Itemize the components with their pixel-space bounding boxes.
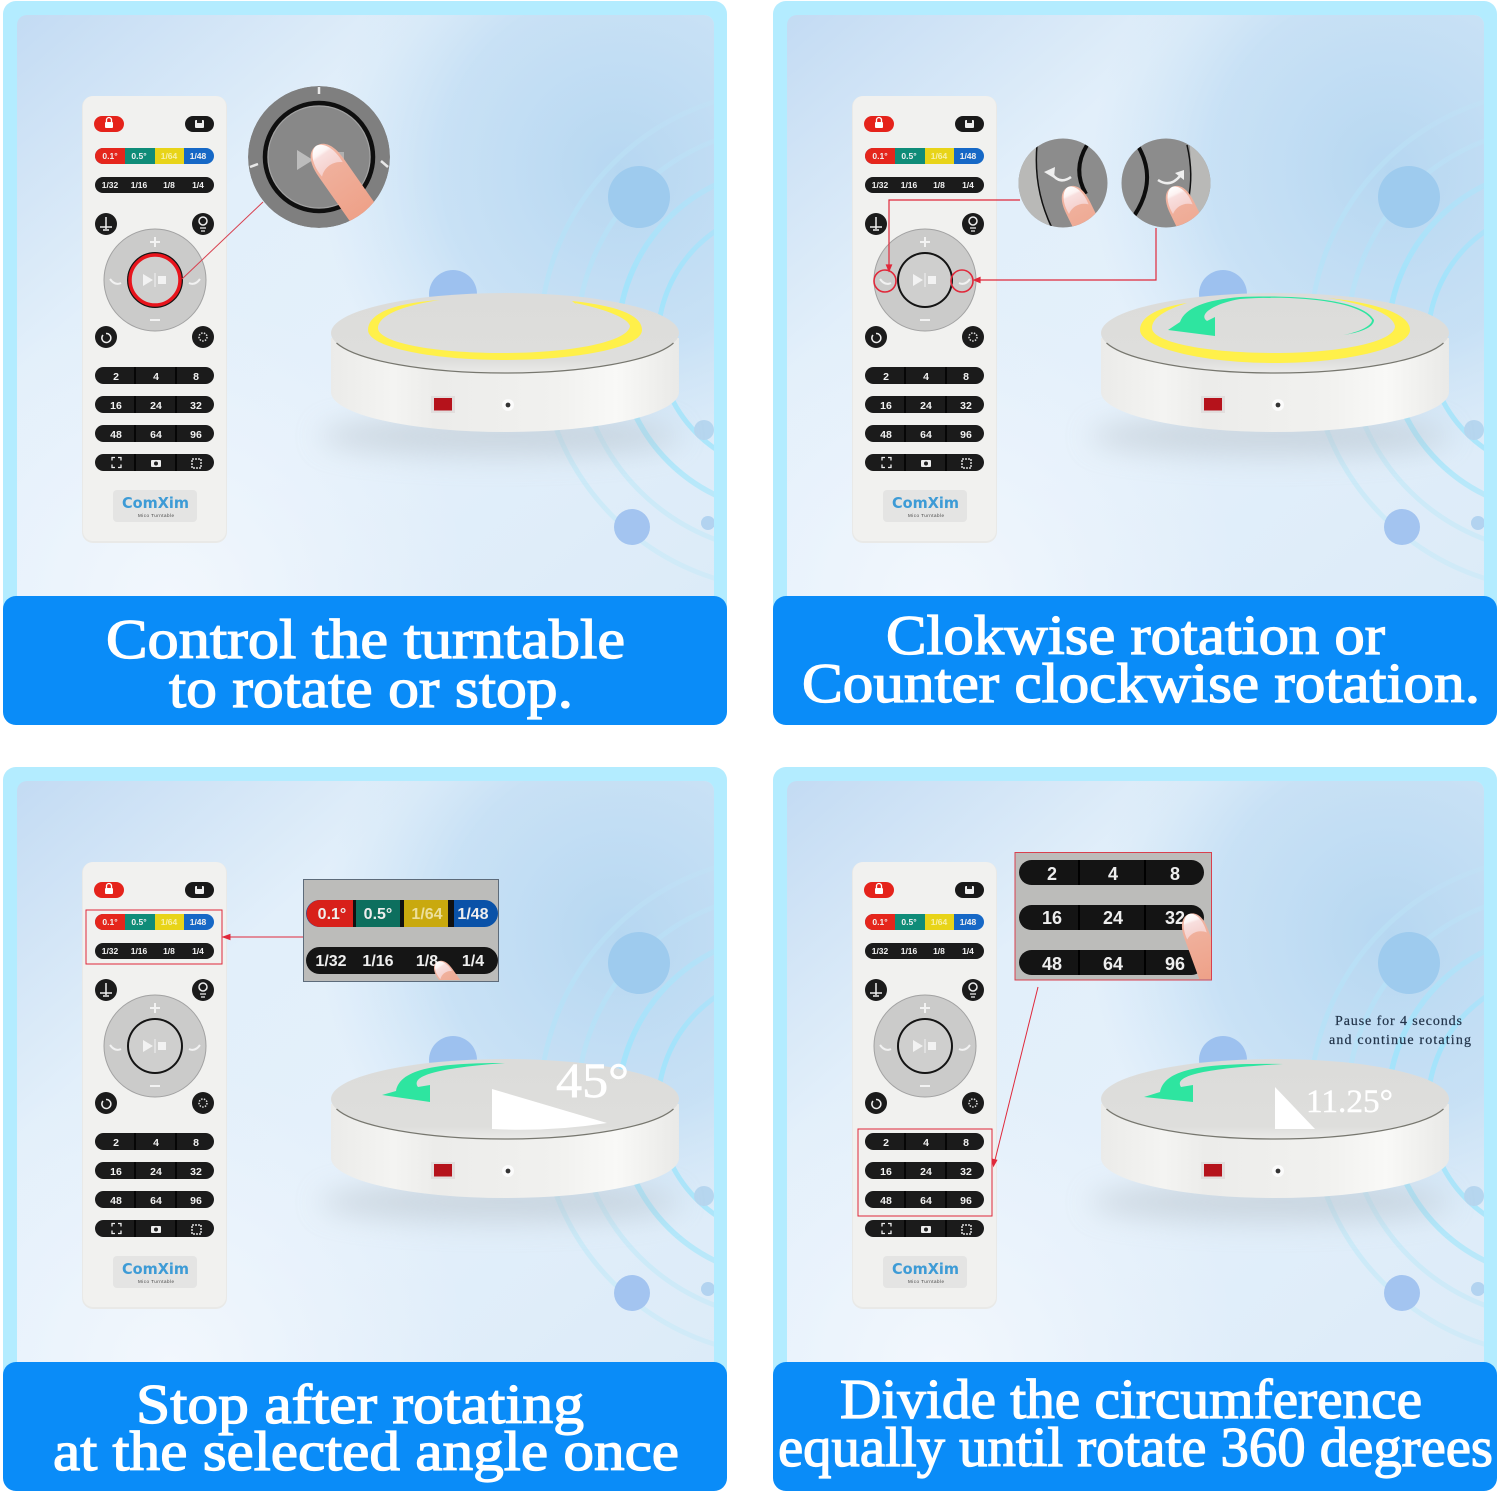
green rotation arrow	[382, 1063, 505, 1102]
turntable	[320, 1059, 680, 1222]
magnified number buttons with finger: 48	[1042, 954, 1062, 974]
remote labels: 1/64	[931, 151, 948, 161]
magnified number buttons with finger: 8	[1170, 864, 1180, 884]
panel background	[773, 1, 1500, 661]
remote labels: 4	[153, 1137, 159, 1149]
remote labels: 24	[150, 1166, 162, 1178]
remote labels: 8	[193, 371, 199, 383]
remote labels: 16	[880, 1166, 892, 1178]
remote control	[82, 96, 227, 543]
remote labels: 1/16	[901, 946, 918, 956]
caption bar: Stop after rotating	[136, 1374, 584, 1436]
remote labels: 32	[190, 1166, 202, 1178]
remote labels: 0.5°	[901, 917, 917, 927]
remote labels: Mico Turntable	[908, 1279, 944, 1284]
remote labels: 1/4	[192, 180, 204, 190]
red highlight on play/stop button	[130, 255, 180, 305]
remote control	[852, 96, 997, 543]
remote labels: 1/48	[960, 917, 977, 927]
pause note	[1329, 1014, 1471, 1048]
remote labels: 16	[880, 400, 892, 412]
remote labels: 1/48	[960, 151, 977, 161]
remote labels: 0.1°	[872, 917, 888, 927]
remote labels: 96	[960, 1195, 972, 1207]
magnified speed buttons with finger: 1/8	[416, 953, 438, 970]
pause note: and continue rotating	[1329, 1033, 1471, 1048]
remote labels: 8	[193, 1137, 199, 1149]
caption bar: Counter clockwise rotation.	[802, 653, 1480, 715]
yellow light ring	[368, 300, 642, 360]
remote labels: 1/64	[161, 151, 178, 161]
panel: control the turntable to rotate or stop	[3, 1, 727, 725]
green rotation arrow	[1144, 1064, 1283, 1102]
remote labels: 1/4	[962, 946, 974, 956]
panel background	[3, 767, 1040, 1427]
remote labels: 1/8	[933, 946, 945, 956]
caption bar: Divide the circumference	[840, 1369, 1422, 1431]
remote labels: 2	[113, 1137, 119, 1149]
remote labels: 4	[923, 1137, 929, 1149]
magnified number buttons with finger: 16	[1042, 908, 1062, 928]
remote labels: 1/16	[131, 180, 148, 190]
remote labels: Mico Turntable	[138, 513, 174, 518]
turntable	[320, 293, 680, 456]
remote labels: 24	[920, 400, 932, 412]
remote labels: 96	[190, 1195, 202, 1207]
magnified number buttons with finger: 96	[1165, 954, 1185, 974]
magnified clockwise button	[1122, 138, 1210, 228]
remote labels: 64	[150, 429, 162, 441]
remote labels: 64	[920, 1195, 932, 1207]
remote control	[852, 862, 997, 1309]
remote labels: Mico Turntable	[908, 513, 944, 518]
45 degree wedge	[492, 1089, 607, 1130]
yellow light ring	[1140, 298, 1410, 363]
caption bar: at the selected angle once	[53, 1421, 679, 1483]
caption bar	[773, 596, 1497, 725]
magnified speed buttons with finger: 1/64	[411, 906, 443, 923]
remote labels: 1/32	[872, 946, 889, 956]
remote labels: ComXim	[122, 1260, 189, 1278]
remote labels: 8	[963, 1137, 969, 1149]
magnified speed buttons with finger: 1/16	[362, 953, 394, 970]
remote labels: 1/4	[962, 180, 974, 190]
remote labels: 1/32	[102, 180, 119, 190]
remote labels: 4	[153, 371, 159, 383]
remote labels: 0.1°	[102, 151, 118, 161]
panel: divide the circumference equally	[773, 767, 1500, 1491]
caption bar	[3, 596, 727, 725]
45 degree label: 45°	[556, 1052, 629, 1108]
caption bar: Control the turntable	[106, 609, 625, 671]
remote labels: 32	[960, 1166, 972, 1178]
magnified speed buttons with finger: 1/32	[315, 953, 347, 970]
callout line	[182, 202, 263, 279]
remote labels: 1/48	[190, 151, 207, 161]
remote labels: 16	[110, 1166, 122, 1178]
remote labels: 48	[880, 1195, 892, 1207]
magnified counter-clockwise button	[1018, 138, 1108, 228]
magnified number buttons with finger: 4	[1108, 864, 1118, 884]
11.25 degree label: 11.25°	[1306, 1084, 1393, 1120]
red box and callout arrow	[86, 910, 303, 964]
remote labels: 1/16	[131, 946, 148, 956]
remote labels	[872, 917, 977, 1284]
remote labels: 4	[923, 371, 929, 383]
turntable	[1090, 1059, 1450, 1222]
remote labels: 64	[920, 429, 932, 441]
remote labels: 0.5°	[131, 917, 147, 927]
remote labels: 1/8	[163, 946, 175, 956]
magnified speed buttons with finger: 0.1°	[318, 906, 346, 923]
remote control	[82, 862, 227, 1309]
remote labels	[102, 151, 207, 518]
remote labels: 24	[150, 400, 162, 412]
remote labels: 24	[920, 1166, 932, 1178]
turntable	[1090, 293, 1450, 456]
remote labels: 1/64	[931, 917, 948, 927]
magnified number buttons with finger: 64	[1103, 954, 1123, 974]
remote labels: 48	[110, 429, 122, 441]
magnified number buttons with finger: 32	[1165, 908, 1185, 928]
remote labels: 2	[113, 371, 119, 383]
magnified speed buttons with finger	[303, 879, 499, 982]
magnified play/stop button with finger	[248, 86, 390, 236]
magnified speed buttons with finger: 1/4	[462, 953, 484, 970]
remote labels: 16	[110, 400, 122, 412]
panel: stop after rotating at the selected angle once	[3, 767, 727, 1491]
green rotation arrow	[1168, 296, 1374, 336]
caption bar	[773, 1362, 1497, 1491]
pause note: Pause for 4 seconds	[1335, 1014, 1462, 1029]
caption bar: Clokwise rotation or	[886, 605, 1385, 667]
red circles and callout arrows	[874, 200, 1156, 292]
panel background	[773, 767, 1500, 1427]
remote labels: 0.1°	[102, 917, 118, 927]
remote labels: 32	[960, 400, 972, 412]
remote labels: ComXim	[122, 494, 189, 512]
11.25 degree wedge	[1275, 1087, 1315, 1129]
remote labels: 48	[110, 1195, 122, 1207]
remote labels: 1/16	[901, 180, 918, 190]
remote labels: 96	[960, 429, 972, 441]
remote labels: 64	[150, 1195, 162, 1207]
remote labels: 1/64	[161, 917, 178, 927]
remote labels: ComXim	[892, 494, 959, 512]
remote labels: 1/32	[102, 946, 119, 956]
panel background	[3, 1, 1040, 661]
remote labels: 0.5°	[131, 151, 147, 161]
red box and callout arrow	[858, 987, 1038, 1216]
remote labels: Mico Turntable	[138, 1279, 174, 1284]
remote labels: 32	[190, 400, 202, 412]
remote labels: 0.5°	[901, 151, 917, 161]
magnified speed buttons with finger: 0.5°	[364, 906, 392, 923]
remote labels	[872, 151, 977, 518]
magnified number buttons with finger: 2	[1047, 864, 1057, 884]
remote labels: 48	[880, 429, 892, 441]
caption bar	[3, 1362, 727, 1491]
remote labels: 1/8	[933, 180, 945, 190]
remote labels: 8	[963, 371, 969, 383]
magnified number buttons with finger: 24	[1103, 908, 1123, 928]
remote labels	[102, 917, 207, 1284]
remote labels: 2	[883, 1137, 889, 1149]
magnified speed buttons with finger: 1/48	[457, 906, 489, 923]
remote labels: ComXim	[892, 1260, 959, 1278]
magnified number buttons with finger	[1014, 852, 1212, 980]
remote labels: 1/8	[163, 180, 175, 190]
remote labels: 0.1°	[872, 151, 888, 161]
remote labels: 2	[883, 371, 889, 383]
remote labels: 1/4	[192, 946, 204, 956]
remote labels: 1/48	[190, 917, 207, 927]
caption bar: to rotate or stop.	[169, 658, 573, 720]
caption bar: equally until rotate 360 degrees	[778, 1417, 1493, 1479]
remote labels: 96	[190, 429, 202, 441]
remote labels: 1/32	[872, 180, 889, 190]
panel: clockwise or counter clockwise rotation	[773, 1, 1500, 725]
